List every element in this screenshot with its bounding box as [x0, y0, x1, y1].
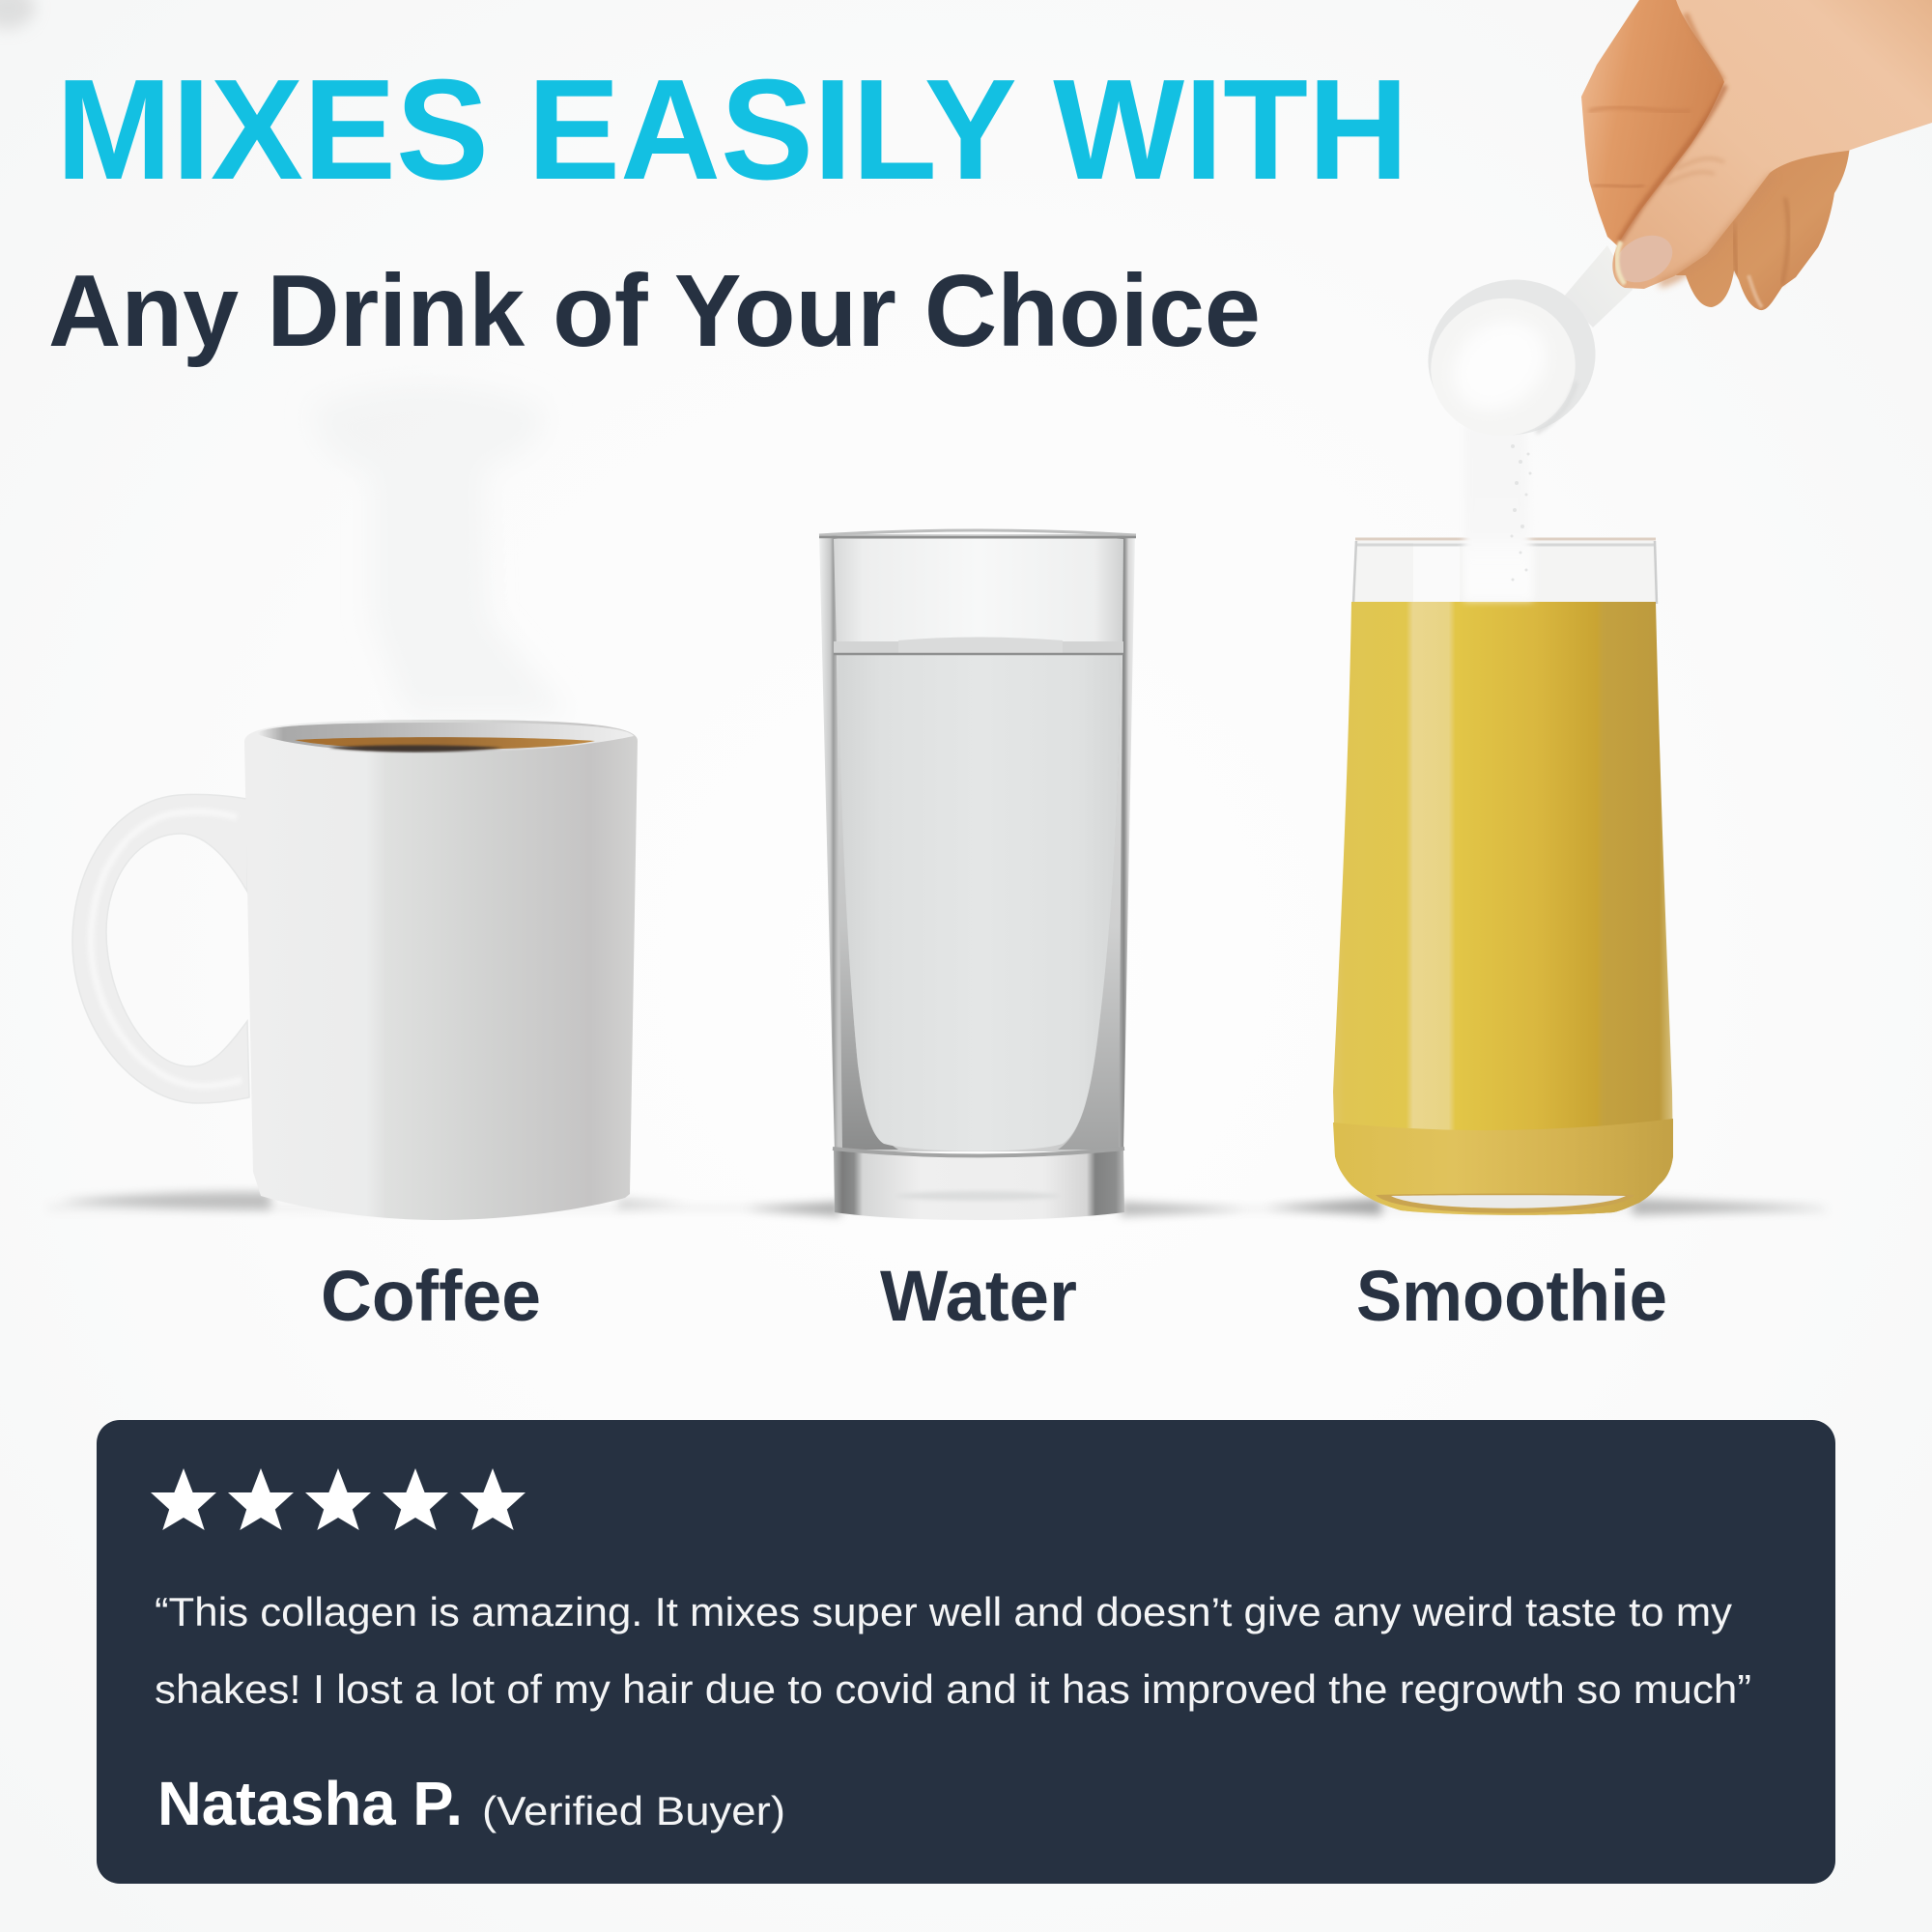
verified buyer tag: (Verified Buyer)	[482, 1788, 785, 1833]
mug opening	[257, 723, 634, 753]
juice	[1333, 602, 1673, 1215]
thumb lower shading	[1660, 176, 1774, 284]
mug handle	[72, 794, 249, 1103]
icon: scoop	[1410, 245, 1633, 454]
review text line 1: “This collagen is amazing. It mixes super well and doesn’t give any weird taste to my	[155, 1589, 1732, 1634]
panel: customer review	[97, 1420, 1835, 1884]
rim	[819, 530, 1136, 535]
lower fingers	[1676, 145, 1850, 310]
glass base	[834, 1150, 1124, 1220]
icon: glass of water	[819, 530, 1136, 1220]
label: smoothie: Smoothie	[1356, 1256, 1667, 1336]
subtitle: Any Drink of Your Choice	[48, 254, 1261, 368]
water	[838, 655, 1121, 1151]
icon: coffee mug	[72, 720, 638, 1220]
glass walls	[819, 534, 1135, 1151]
icon: falling powder	[1464, 425, 1532, 601]
icon: glass of yellow smoothie	[1333, 539, 1673, 1215]
back of hand and thumb	[1612, 0, 1932, 289]
curled index finger	[1581, 0, 1734, 247]
coffee surface	[295, 737, 595, 750]
juice lower band	[1333, 1119, 1673, 1215]
reviewer name: Natasha P.	[157, 1769, 463, 1838]
review text line 2: shakes! I lost a lot of my hair due to covid and it has improved the regrowth so much”	[155, 1666, 1751, 1712]
steam above coffee	[314, 384, 570, 715]
thumb knuckle creases	[1666, 158, 1724, 184]
title: MIXES EASILY WITH	[56, 50, 1408, 210]
powder in glass	[1464, 543, 1534, 601]
icon: hand holding scoop	[1581, 0, 1932, 310]
mug body	[244, 720, 638, 1220]
label: water: Water	[880, 1256, 1077, 1336]
lower corner wedges	[837, 653, 898, 1150]
floor shadow	[48, 1192, 1826, 1216]
scoop bowl	[1410, 261, 1613, 454]
thumb nail	[1607, 226, 1681, 292]
crease between finger and thumb	[1619, 85, 1725, 242]
label: coffee: Coffee	[321, 1256, 541, 1336]
icon: five stars	[151, 1468, 526, 1530]
glass foot	[1376, 1194, 1634, 1213]
air part of glass	[834, 539, 1123, 645]
scoop handle	[1563, 245, 1633, 327]
upper empty glass	[1352, 541, 1657, 604]
water surface	[834, 641, 1123, 654]
